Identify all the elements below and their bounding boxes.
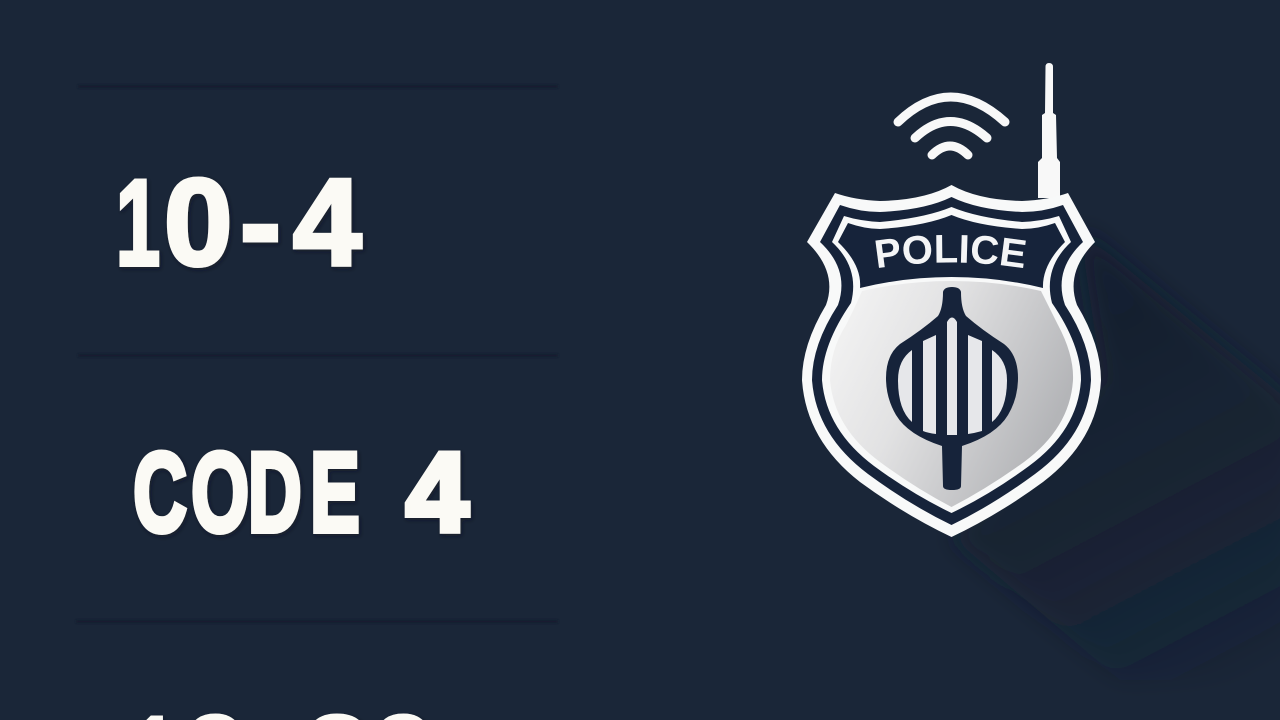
icon: radio waves — [898, 97, 1005, 155]
badge metal shield — [830, 281, 1073, 507]
baton silhouette — [886, 287, 1018, 490]
badge navy band — [812, 197, 1091, 525]
baton emblem — [886, 287, 1018, 490]
divider top — [78, 85, 558, 88]
banner label — [873, 262, 1028, 269]
code: 10-4: 1 — [116, 154, 160, 291]
police badge: POLICE — [875, 235, 1026, 268]
code: CODE 4: 4 — [406, 430, 468, 555]
icon: antenna — [1038, 63, 1060, 198]
code: 10-4: 0-4 — [164, 155, 361, 292]
badge inner rim — [822, 207, 1081, 513]
divider bottom — [76, 620, 558, 623]
divider middle — [78, 354, 558, 357]
police banner — [838, 215, 1065, 288]
baton grille bars — [898, 318, 1007, 435]
badge outer rim — [802, 185, 1101, 537]
code: CODE 4: CODE — [133, 431, 359, 556]
code: CODE 4 — [133, 430, 468, 556]
long shadow of badge — [952, 230, 1280, 680]
police badge — [802, 185, 1101, 537]
